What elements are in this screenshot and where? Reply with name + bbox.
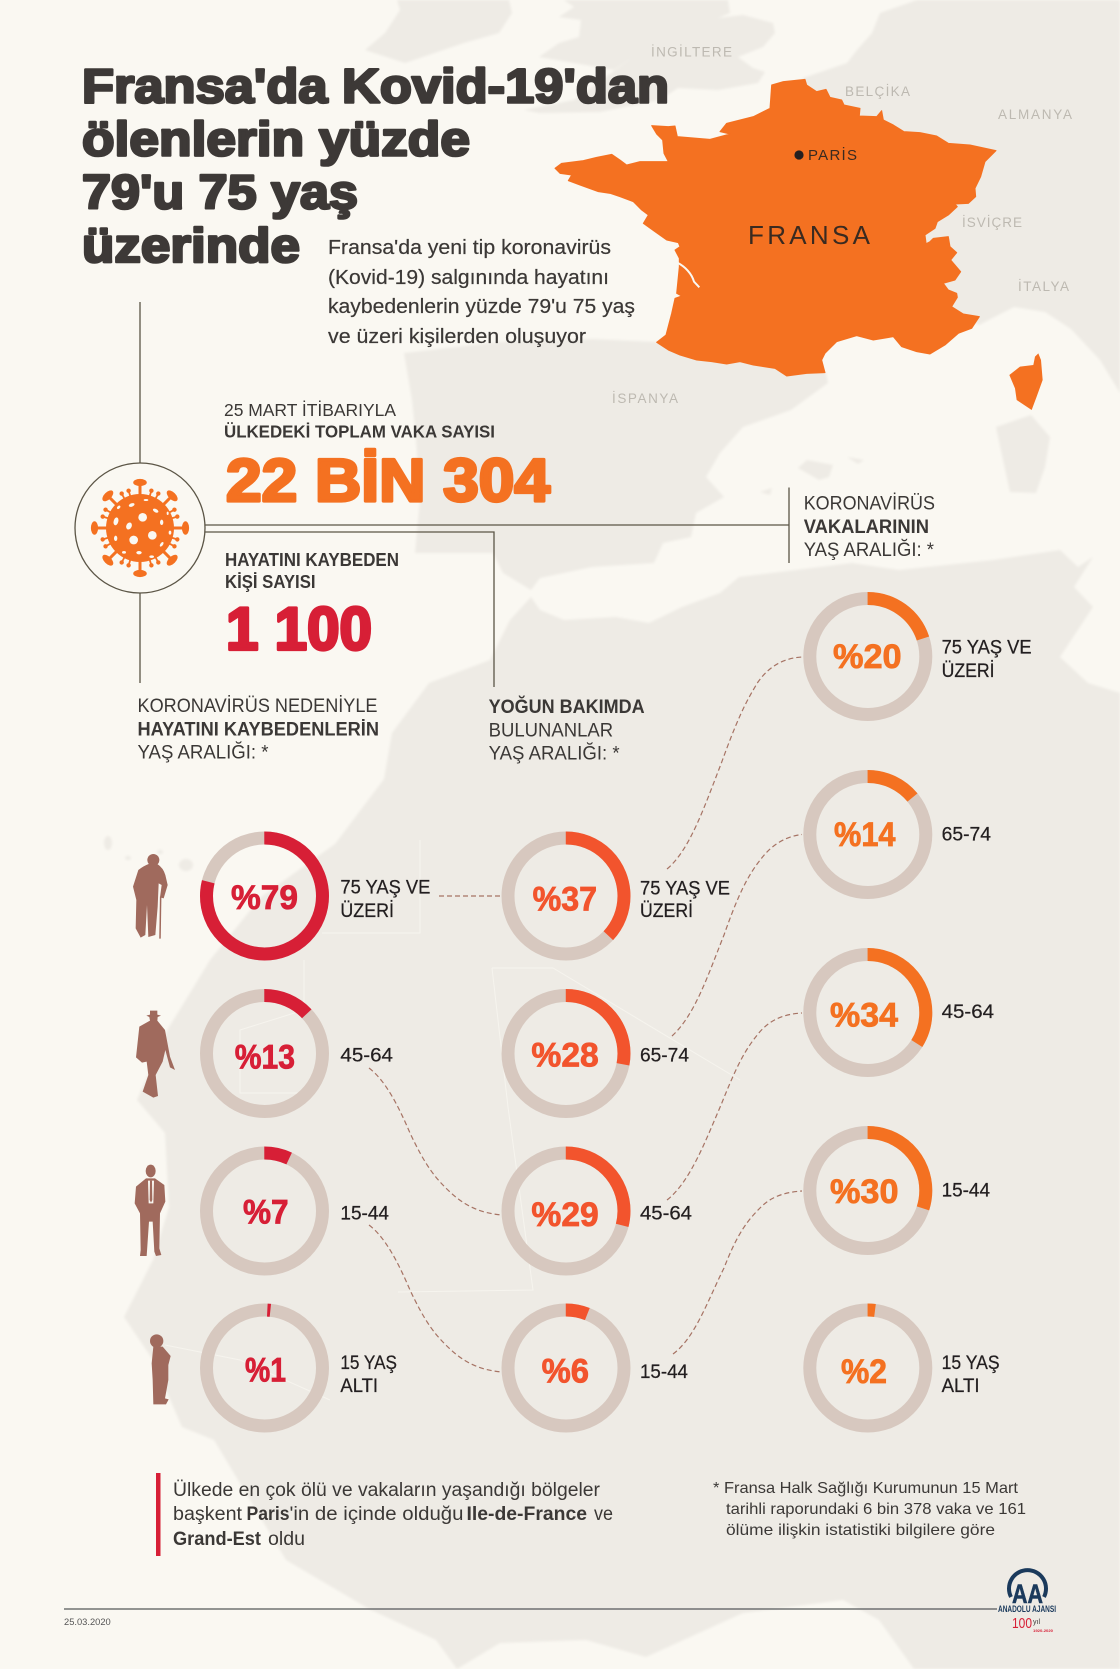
age labels: intensive care column: 45-64 bbox=[640, 1203, 692, 1224]
intro text: Fransa'da yeni tip koronavirüs bbox=[328, 237, 611, 259]
column: deaths donuts bbox=[204, 838, 325, 1429]
callout: regions: başkent bbox=[173, 1504, 243, 1525]
donut: deaths under 15: %1 bbox=[245, 1352, 286, 1390]
donut: cases 65-74 bbox=[810, 776, 926, 892]
age labels: cases column: 45-64 bbox=[942, 1002, 994, 1023]
footnote: tarihli raporundaki 6 bin 378 vaka ve 161 bbox=[726, 1501, 1026, 1518]
donut: ICU 15-44 bbox=[508, 1310, 624, 1426]
column heading: intensive care: YAŞ ARALIĞI: * bbox=[489, 742, 620, 764]
logo: Anadolu Ajansı bbox=[998, 1570, 1056, 1633]
title: ölenlerin yüzde bbox=[82, 114, 470, 167]
icon: virus in circle bbox=[75, 463, 205, 593]
title: 79'u 75 yaş bbox=[82, 167, 358, 220]
donut: ICU 65-74: %28 bbox=[531, 1037, 599, 1075]
donut: deaths 45-64 bbox=[206, 996, 322, 1112]
Paris marker: PARİS bbox=[808, 146, 857, 164]
title bbox=[82, 61, 669, 273]
icon: man with hat bbox=[136, 1011, 175, 1098]
donut: deaths 75+: %79 bbox=[231, 879, 298, 917]
age labels: cases column: 15 YAŞ bbox=[942, 1353, 1000, 1374]
total cases block bbox=[224, 400, 551, 514]
intro text: kaybedenlerin yüzde 79'u 75 yaş bbox=[328, 296, 635, 318]
age labels: cases column: 65-74 bbox=[942, 825, 991, 846]
callout: regions: oldu bbox=[268, 1529, 305, 1550]
column heading: cases bbox=[804, 494, 935, 561]
deaths block: 1 100 bbox=[226, 596, 372, 662]
map label: Almanya: ALMANYA bbox=[998, 107, 1072, 122]
donut: ICU 45-64: %29 bbox=[531, 1196, 599, 1234]
donut: cases 15-44: %30 bbox=[830, 1173, 898, 1211]
age labels: deaths column: 15-44 bbox=[340, 1203, 389, 1224]
column heading: cases: YAŞ ARALIĞI: * bbox=[804, 539, 935, 561]
column heading: intensive care bbox=[489, 696, 645, 764]
callout: regions: Grand-Est bbox=[173, 1529, 262, 1550]
column: intensive care donuts bbox=[508, 838, 624, 1426]
callout: regions: Paris bbox=[246, 1504, 290, 1525]
title: üzerinde bbox=[82, 220, 300, 273]
column: cases donuts bbox=[810, 598, 926, 1426]
footnote: * Fransa Halk Sağlığı Kurumunun 15 Mart bbox=[713, 1480, 1019, 1497]
donut: cases under 15 bbox=[810, 1310, 926, 1426]
total cases block: 22 BİN 304 bbox=[226, 447, 551, 514]
age labels: deaths column: 45-64 bbox=[340, 1046, 393, 1067]
map of France bbox=[555, 79, 1043, 410]
callout: regions: 'in de içinde olduğu bbox=[290, 1504, 464, 1525]
age labels: deaths column: ALTI bbox=[340, 1376, 378, 1397]
age labels: intensive care column: 15-44 bbox=[640, 1362, 688, 1383]
label: Fransa: FRANSA bbox=[748, 220, 871, 250]
age labels: cases column bbox=[942, 638, 1032, 1397]
map label: Belçika: BELÇİKA bbox=[845, 84, 910, 99]
dashed connectors bbox=[369, 657, 802, 1372]
deaths block: KİŞİ SAYISI bbox=[225, 572, 316, 592]
donut: cases 45-64 bbox=[810, 954, 926, 1070]
age labels: cases column: 15-44 bbox=[942, 1181, 990, 1202]
donut: deaths 15-44 bbox=[206, 1153, 322, 1269]
virus holes bbox=[113, 499, 171, 558]
donut: deaths 75+ bbox=[206, 838, 322, 954]
column heading: deaths bbox=[138, 696, 379, 764]
logo: Anadolu Ajansı: yıl bbox=[1033, 1619, 1040, 1626]
virus spikes bbox=[91, 479, 189, 577]
intro text: ve üzeri kişilerden oluşuyor bbox=[328, 326, 586, 348]
age labels: cases column: ALTI bbox=[942, 1376, 980, 1397]
intro text bbox=[328, 237, 635, 348]
intro text: (Kovid-19) salgınında hayatını bbox=[328, 267, 609, 289]
icon: child bbox=[150, 1334, 171, 1404]
age labels: intensive care column: ÜZERİ bbox=[640, 901, 693, 922]
icon: man in suit bbox=[135, 1165, 165, 1256]
logo: Anadolu Ajansı: 100 bbox=[1012, 1615, 1032, 1632]
age labels: cases column: ÜZERİ bbox=[942, 661, 995, 682]
donut: ICU 75+: %37 bbox=[533, 881, 597, 919]
map label: İngiltere: İNGİLTERE bbox=[651, 45, 732, 60]
connector lines bbox=[140, 302, 789, 687]
icon: elderly man with cane bbox=[133, 854, 168, 939]
age labels: intensive care column: 65-74 bbox=[640, 1046, 689, 1067]
map label: İsviçre: İSVİÇRE bbox=[962, 215, 1022, 230]
column heading: deaths: YAŞ ARALIĞI: * bbox=[138, 742, 269, 764]
callout: regions: Ile-de-France bbox=[466, 1504, 587, 1525]
column heading: cases: KORONAVİRÜS bbox=[804, 494, 935, 515]
donut: ICU 15-44: %6 bbox=[542, 1353, 589, 1391]
donut: cases 75+: %20 bbox=[833, 638, 902, 676]
callout: regions: Ülkede en çok ölü ve vakaların yaşandığı bölgeler bbox=[173, 1480, 601, 1501]
footnote bbox=[713, 1480, 1026, 1539]
donut: cases 15-44 bbox=[810, 1132, 926, 1248]
date: 25.03.2020 bbox=[64, 1617, 111, 1628]
age labels: deaths column: 75 YAŞ VE bbox=[340, 878, 430, 899]
donut: cases 45-64: %34 bbox=[830, 996, 898, 1034]
donut: ICU 75+ bbox=[508, 838, 624, 954]
column heading: intensive care: YOĞUN BAKIMDA bbox=[489, 696, 645, 718]
callout: regions bbox=[156, 1473, 613, 1556]
age labels: intensive care column bbox=[640, 878, 730, 1383]
column heading: intensive care: BULUNANLAR bbox=[489, 720, 613, 742]
donut: cases under 15: %2 bbox=[841, 1353, 887, 1391]
total cases block: ÜLKEDEKİ TOPLAM VAKA SAYISI bbox=[224, 422, 495, 442]
map label: İspanya: İSPANYA bbox=[612, 391, 678, 406]
age labels: deaths column: ÜZERİ bbox=[340, 901, 394, 922]
donut: ICU 65-74 bbox=[508, 996, 624, 1112]
age labels: cases column: 75 YAŞ VE bbox=[942, 638, 1032, 659]
donut: deaths 45-64: %13 bbox=[235, 1038, 295, 1076]
logo: Anadolu Ajansı: AA bbox=[1012, 1579, 1043, 1609]
map label: İtalya: İTALYA bbox=[1018, 279, 1069, 294]
donut: ICU 45-64 bbox=[508, 1153, 624, 1269]
column heading: cases: VAKALARININ bbox=[804, 517, 929, 538]
callout: regions: ve bbox=[594, 1504, 613, 1525]
donut: cases 75+ bbox=[810, 598, 926, 714]
deaths block bbox=[225, 550, 399, 662]
donut: cases 65-74: %14 bbox=[834, 816, 896, 854]
logo: Anadolu Ajansı: ANADOLU AJANSI bbox=[998, 1604, 1056, 1614]
age labels: deaths column: 15 YAŞ bbox=[340, 1353, 397, 1374]
total cases block: 25 MART İTİBARIYLA bbox=[224, 400, 396, 420]
age labels: intensive care column: 75 YAŞ VE bbox=[640, 878, 730, 900]
title: Fransa'da Kovid-19'dan bbox=[82, 61, 669, 114]
age labels: deaths column bbox=[340, 878, 430, 1397]
donut: deaths under 15 bbox=[204, 1307, 325, 1429]
column heading: deaths: HAYATINI KAYBEDENLERİN bbox=[138, 719, 379, 740]
logo: Anadolu Ajansı: 1920-2020 bbox=[1033, 1628, 1054, 1633]
footnote: ölüme ilişkin istatistiki bilgilere göre bbox=[726, 1522, 995, 1539]
donut: deaths 15-44: %7 bbox=[243, 1193, 289, 1231]
column heading: deaths: KORONAVİRÜS NEDENİYLE bbox=[138, 696, 378, 717]
deaths block: HAYATINI KAYBEDEN bbox=[225, 550, 399, 570]
